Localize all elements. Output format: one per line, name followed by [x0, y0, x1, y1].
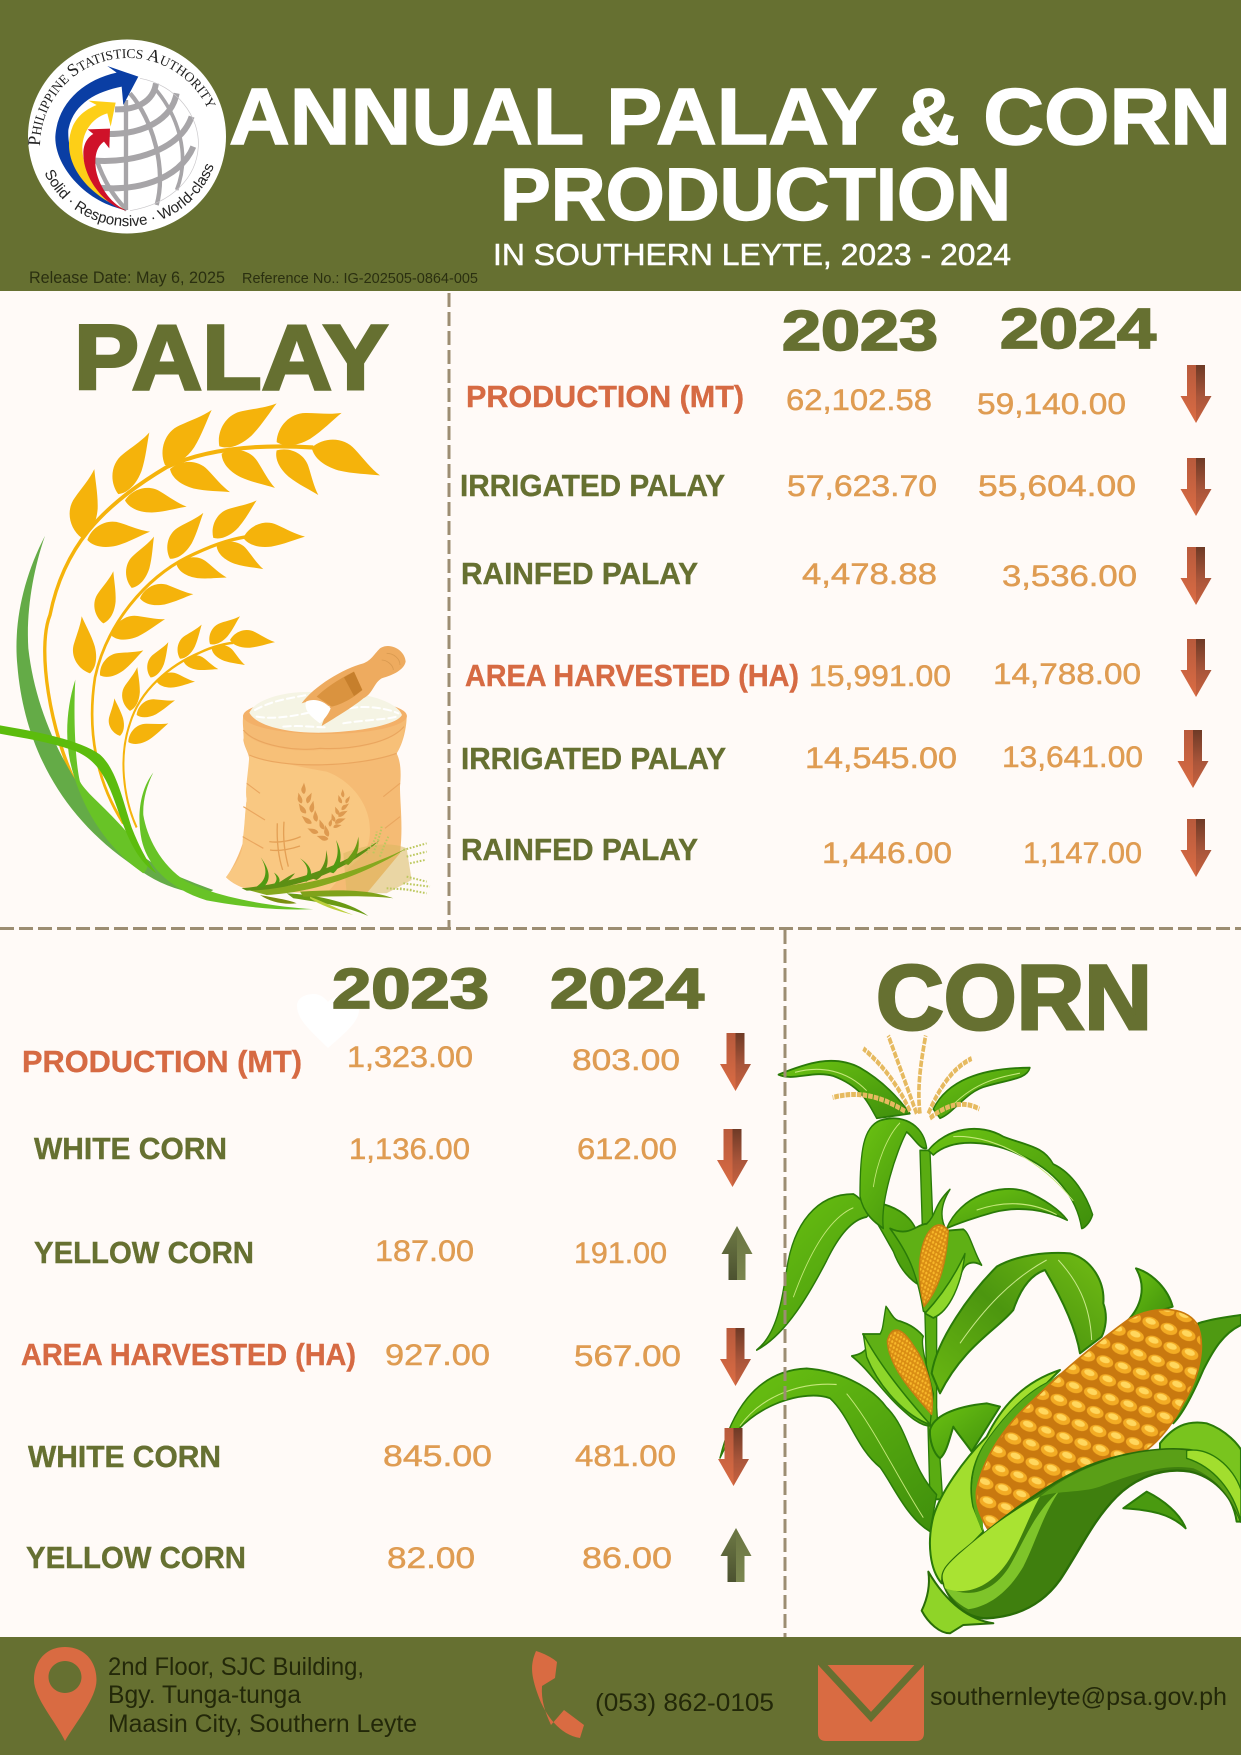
- row: irrigated palay production: 57,623.70: [787, 470, 937, 503]
- row: yellow corn area: 82.00: [387, 1542, 475, 1575]
- year headers: 2023: [782, 299, 938, 363]
- row: production: 1,323.00: [347, 1041, 473, 1074]
- row: area harvested: 567.00: [574, 1340, 681, 1373]
- row: yellow corn area: 86.00: [582, 1542, 672, 1575]
- row: rainfed palay production: [461, 547, 1212, 605]
- heading: CORN: CORN: [876, 947, 1152, 1049]
- row: production: 803.00: [572, 1044, 680, 1077]
- row: yellow corn area: [26, 1528, 752, 1582]
- logo: Philippine Statistics Authority seal: PHILIPPINE STATISTICS AUTHORITY: [28, 49, 216, 146]
- illustration: golden rice stalks and grass: [0, 390, 387, 910]
- row: rainfed palay production: 4,478.88: [802, 558, 937, 591]
- title: ANNUAL PALAY & CORN: [229, 72, 1231, 161]
- row: irrigated palay production: IRRIGATED PALAY: [460, 468, 725, 503]
- illustration: corn plant: [720, 1036, 1093, 1531]
- address: 2nd Floor, SJC Building,: [108, 1653, 364, 1681]
- title: IN SOUTHERN LEYTE, 2023 - 2024: [493, 237, 1011, 272]
- row: production: 59,140.00: [977, 388, 1126, 421]
- row: yellow corn production: 187.00: [375, 1235, 474, 1268]
- panel: palay table: [460, 297, 1212, 877]
- panel: corn table: [21, 957, 752, 1582]
- row: yellow corn production: YELLOW CORN: [34, 1235, 254, 1270]
- row: white corn area: 481.00: [575, 1440, 676, 1473]
- row: area harvested: 15,991.00: [809, 660, 951, 693]
- header band: [0, 0, 1241, 291]
- address: Maasin City, Southern Leyte: [108, 1710, 417, 1738]
- icon: location pin: [34, 1647, 96, 1741]
- panel: corn heading and illustration: [720, 947, 1241, 1633]
- row: area harvested: AREA HARVESTED (HA): [465, 658, 799, 693]
- release date and reference number: [29, 268, 478, 287]
- husk base: [922, 1572, 993, 1633]
- row: rainfed palay area: 1,446.00: [822, 837, 952, 870]
- row: white corn area: [28, 1428, 749, 1486]
- icon: envelope: [818, 1663, 924, 1741]
- logo: Philippine Statistics Authority seal: [28, 40, 226, 234]
- row: rainfed palay production: 3,536.00: [1002, 560, 1137, 593]
- small ears: [890, 1189, 982, 1313]
- row: area harvested: [465, 639, 1212, 697]
- row: irrigated palay area: [461, 730, 1208, 788]
- illustration: corn cob in husk: [922, 1253, 1241, 1633]
- release date and reference number: Reference No.: IG-202505-0864-005: [242, 271, 478, 287]
- heading: PALAY: PALAY: [74, 307, 388, 409]
- year headers: 2023: [332, 957, 489, 1021]
- row: rainfed palay area: 1,147.00: [1023, 837, 1142, 870]
- row: white corn production: WHITE CORN: [34, 1131, 227, 1166]
- row: yellow corn area: YELLOW CORN: [26, 1540, 246, 1575]
- row: production: [22, 1033, 751, 1091]
- row: irrigated palay area: IRRIGATED PALAY: [461, 741, 726, 776]
- row: area harvested: [21, 1328, 751, 1386]
- row: production: 62,102.58: [786, 384, 932, 417]
- row: white corn production: [34, 1129, 748, 1187]
- row: irrigated palay area: 14,545.00: [805, 742, 957, 775]
- address: Bgy. Tunga-tunga: [108, 1681, 301, 1709]
- year headers: 2024: [550, 957, 704, 1021]
- year headers: 2024: [1000, 297, 1156, 361]
- leaves behind the cob: [930, 1253, 1241, 1583]
- front husk: [942, 1449, 1241, 1618]
- row: white corn area: 845.00: [383, 1440, 492, 1473]
- row: production: PRODUCTION (MT): [466, 379, 744, 414]
- row: white corn production: 612.00: [577, 1133, 677, 1166]
- row: production: PRODUCTION (MT): [22, 1044, 302, 1079]
- year headers: [332, 957, 704, 1021]
- address: [108, 1653, 417, 1738]
- phone number: (053) 862-0105: [595, 1689, 774, 1717]
- illustration: rice plant sprig: [242, 827, 430, 916]
- email address: southernleyte@psa.gov.ph: [930, 1683, 1227, 1711]
- row: yellow corn production: [34, 1226, 752, 1280]
- year headers: [782, 297, 1156, 363]
- row: area harvested: AREA HARVESTED (HA): [21, 1337, 356, 1372]
- row: irrigated palay area: 13,641.00: [1002, 741, 1143, 774]
- row: white corn production: 1,136.00: [349, 1133, 470, 1166]
- row: irrigated palay production: 55,604.00: [978, 470, 1136, 503]
- logo: Philippine Statistics Authority seal: Solid · Responsive · World-class: [46, 164, 214, 226]
- row: rainfed palay production: RAINFED PALAY: [461, 556, 698, 591]
- row: area harvested: 14,788.00: [993, 658, 1141, 691]
- title: PRODUCTION: [500, 153, 1011, 236]
- footer band: [0, 1637, 1241, 1755]
- release date and reference number: Release Date: May 6, 2025: [29, 268, 225, 287]
- row: area harvested: 927.00: [385, 1339, 490, 1372]
- title: [229, 72, 1231, 272]
- icon: telephone: [532, 1651, 584, 1738]
- row: yellow corn production: 191.00: [574, 1237, 667, 1270]
- row: rainfed palay area: RAINFED PALAY: [461, 832, 698, 867]
- row: irrigated palay production: [460, 458, 1212, 516]
- illustration: sack of rice with scoop: [226, 646, 430, 916]
- white heart accent: [297, 994, 359, 1048]
- panel: palay heading and illustration: [0, 307, 430, 916]
- row: production: [466, 365, 1212, 423]
- tassel: [833, 1036, 979, 1118]
- kernels: [976, 1310, 1201, 1530]
- row: rainfed palay area: [461, 819, 1212, 877]
- row: white corn area: WHITE CORN: [28, 1439, 221, 1474]
